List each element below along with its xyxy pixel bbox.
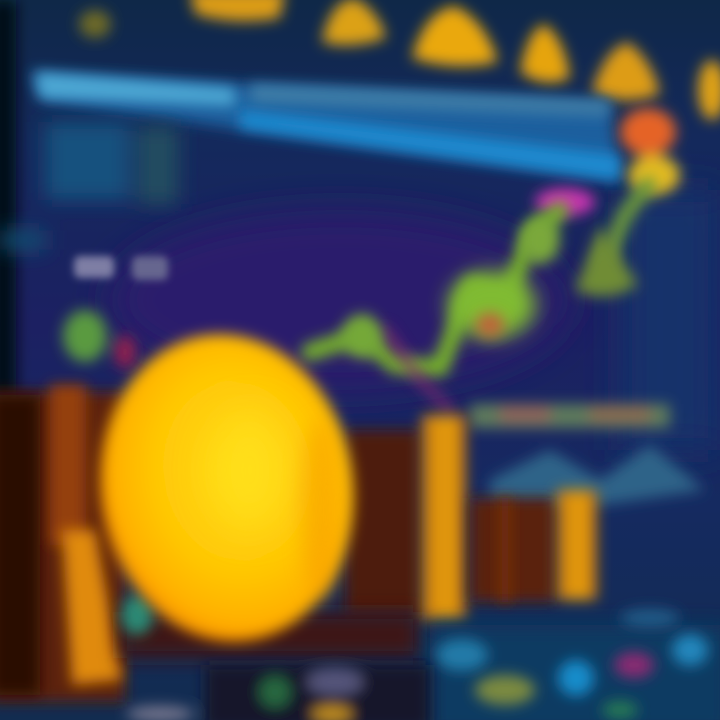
orange and yellow markers — [535, 108, 680, 216]
right data strip — [470, 404, 705, 505]
bottom dashboard tiles — [430, 609, 720, 720]
left green and red markers — [63, 310, 136, 369]
left dim panel — [0, 122, 178, 250]
blue banner — [32, 72, 620, 182]
blurred label — [74, 256, 168, 280]
top row of gold shapes — [79, 0, 720, 120]
brown and orange bars — [0, 385, 597, 702]
gold coin — [81, 318, 373, 658]
bottom left blurred items — [126, 665, 430, 720]
rising green chart line — [310, 185, 648, 410]
